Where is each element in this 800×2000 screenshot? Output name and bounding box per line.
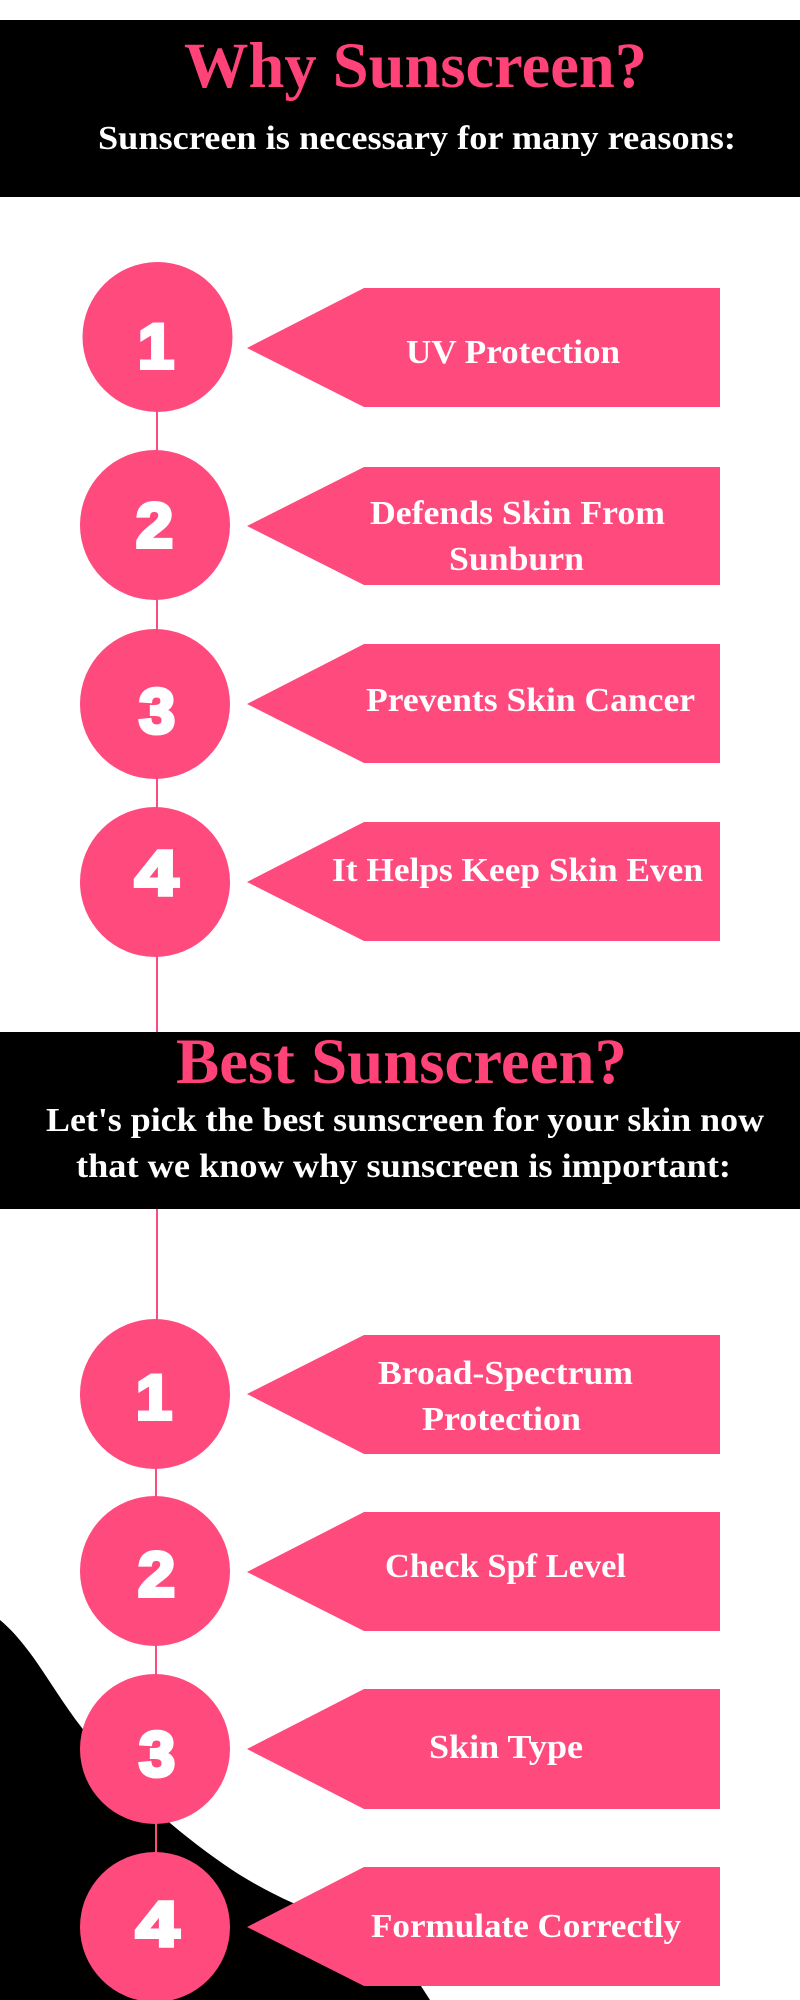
tip 2: check spf level [80,1496,720,1646]
arrow label: check spf level: Check Spf Level [385,1548,626,1585]
number circle 3: 3 [139,1720,175,1790]
tip 4: formulate correctly [80,1852,720,2000]
number circle 2 [80,1496,230,1646]
number circle 1: 1 [138,312,174,382]
subtitle: Sunscreen is necessary for many reasons: [98,120,736,157]
arrow label: prevents skin cancer: Prevents Skin Cancer [366,682,695,719]
tip 3: skin type [80,1674,720,1824]
number circle 3 [80,1674,230,1824]
arrow label: check spf level [247,1512,720,1631]
connector line [156,400,158,1330]
reason 4: keeps skin even [80,807,720,957]
number circle 1 [80,1319,230,1469]
arrow label: UV protection [247,288,720,407]
arrow label: formulate correctly [247,1867,720,1986]
number circle 4 [80,1852,230,2000]
arrow label: prevents skin cancer [247,644,720,763]
number circle 2: 2 [138,1540,175,1610]
arrow label: defends skin from sunburn: Sunburn [449,541,584,578]
number circle 2: 2 [136,491,173,561]
number circle 1: 1 [136,1363,172,1433]
number circle 4: 4 [135,839,178,909]
number circle 4: 4 [136,1890,179,1960]
reason 1: UV protection [82,262,720,412]
reason 2: defends skin [80,450,720,600]
title: why sunscreen: Why Sunscreen? [184,30,647,102]
arrow label: broad-spectrum protection [247,1335,720,1454]
intro text: that we know why sunscreen is important: [76,1148,731,1185]
number circle 3: 3 [139,677,175,747]
arrow label: UV protection: UV Protection [406,334,620,371]
arrow label: it helps keep skin even: It Helps Keep Skin Even [332,852,703,889]
arrow label: skin type [247,1689,720,1809]
arrow label: skin type: Skin Type [429,1729,583,1766]
number circle 1 [82,262,232,412]
reason 3: prevents skin cancer [80,629,720,779]
intro text: Let's pick the best sunscreen for your skin now [46,1102,764,1139]
number circle 2 [80,450,230,600]
arrow label: broad-spectrum protection: Protection [422,1401,581,1438]
decorative black wave, bottom left [0,1620,430,2000]
arrow label: it helps keep skin even [247,822,720,941]
arrow label: formulate correctly: Formulate Correctly [371,1908,681,1945]
arrow label: defends skin from sunburn [247,467,720,585]
connector line, lower section [155,1330,157,1930]
number circle 4 [80,807,230,957]
intro text [46,1102,764,1185]
panel: why sunscreen header [0,20,800,197]
arrow label: defends skin from sunburn: Defends Skin From [370,495,665,532]
title: best sunscreen: Best Sunscreen? [176,1026,627,1098]
arrow label: broad-spectrum protection: Broad-Spectrum [378,1355,633,1392]
panel: best sunscreen header [0,1026,800,1209]
number circle 3 [80,629,230,779]
tip 1: broad-spectrum protection [80,1319,720,1469]
